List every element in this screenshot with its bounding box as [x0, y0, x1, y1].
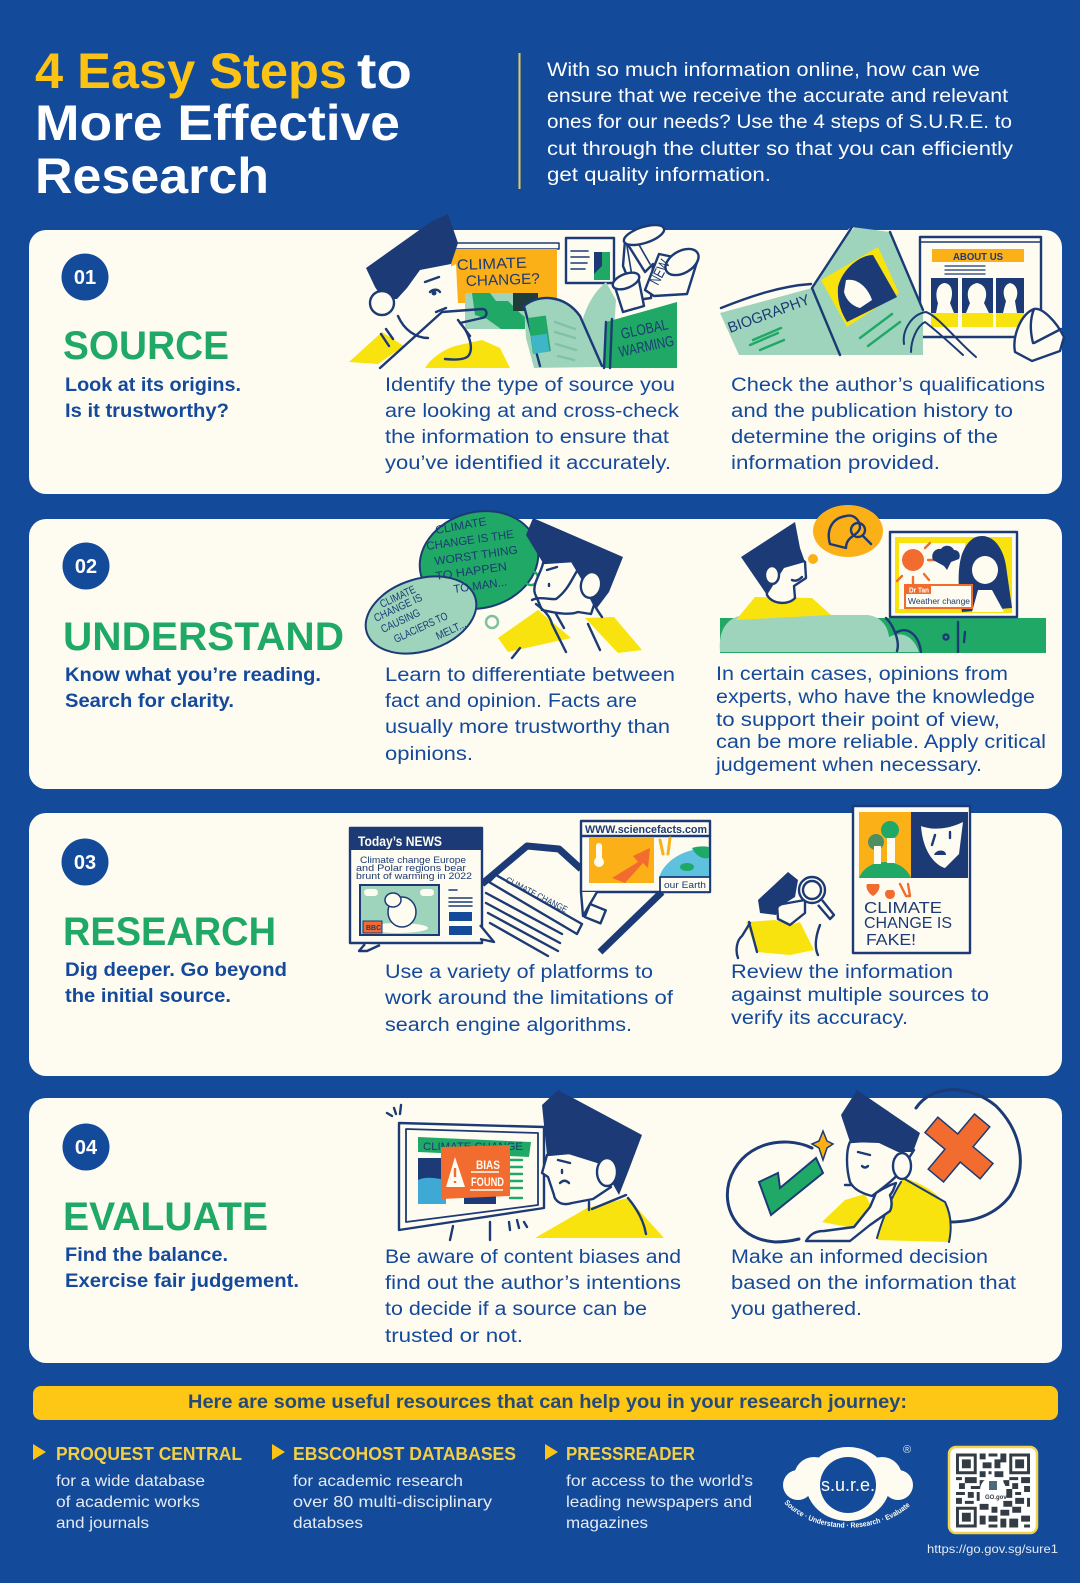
illustration: boy weighing opinions: CHANGE IS: [372, 592, 424, 625]
step number 01: 01: [74, 267, 96, 289]
body: fact and opinion: [385, 665, 675, 765]
body: biases: [385, 1247, 681, 1347]
title: to: [357, 43, 412, 99]
resource: pressreader: for access to the world’s: [566, 1473, 753, 1490]
illustration: boy with climate screen and books: CLIMATE: [457, 255, 527, 274]
body: biases: trusted or not.: [385, 1326, 523, 1347]
resource: proquest: [33, 1444, 242, 1532]
illustration: news window, search page and browser: CLIMATE CHANGE: [504, 875, 569, 915]
illustration: boy weighing opinions: CLIMATE: [434, 516, 488, 537]
illustration: boy weighing opinions: TO MAN...: [453, 577, 508, 596]
step number 02: [62, 542, 110, 590]
body: experts: experts, who have the knowledge: [716, 687, 1035, 708]
body: source type: you’ve identified it accurately.: [385, 453, 671, 474]
illustration: boy with climate screen and books: WARMING: [617, 333, 676, 361]
subheading: Know what you’re reading.: [65, 665, 321, 686]
step number 03: [62, 838, 108, 886]
illustration: boy weighing opinions: TO HAPPEN: [435, 561, 508, 583]
illustration: boy weighing opinions: CHANGE IS THE: [426, 529, 515, 553]
illustration: news window, search page and browser: BBC: [366, 925, 381, 932]
logo: s.u.r.e. cloud: [783, 1444, 913, 1528]
illustration: boy checking social post: FAKE!: [866, 932, 916, 949]
illustration: bias found on monitor: [387, 1090, 664, 1240]
illustration: boy weighing opinions: WORST THING: [434, 544, 519, 568]
resource: proquest: PROQUEST CENTRAL: [56, 1444, 242, 1464]
illustration: bias found on monitor: BIAS: [476, 1158, 500, 1172]
subheading: Look at its origins.: [65, 375, 241, 396]
body: verify: [731, 962, 989, 1029]
heading: source: SOURCE: [63, 324, 229, 368]
subheading: Find the balance.: [65, 1245, 228, 1266]
resource: pressreader: PRESSREADER: [566, 1444, 695, 1464]
heading: evaluate: EVALUATE: [63, 1195, 268, 1239]
intro text: ensure that we receive the accurate and relevant: [547, 86, 1009, 107]
body: verify: verify its accuracy.: [731, 1008, 908, 1029]
subheading: [65, 375, 241, 422]
step number 04: [62, 1124, 110, 1170]
illustration: boy with climate screen and books: GLOBAL: [619, 316, 670, 343]
title: More Effective: [35, 95, 400, 151]
body: fact and opinion: opinions.: [385, 744, 473, 765]
illustration: news window, search page and browser: and Polar regions bear: [356, 863, 466, 874]
intro text: ones for our needs? Use the 4 steps of S.U.R.E. to: [547, 112, 1012, 133]
body: decision: you gathered.: [731, 1299, 862, 1320]
illustration: boy weighing opinions: CLIMATE: [378, 584, 418, 611]
banner: resources heading: [33, 1386, 1058, 1420]
illustration: biography book and about us page: BIOGRAPHY: [726, 291, 812, 337]
logo: s.u.r.e. cloud: s.u.r.e.: [821, 1475, 875, 1495]
body: source type: the information to ensure that: [385, 427, 670, 448]
step number 02: 02: [75, 556, 97, 578]
illustration: boy with climate screen and books: [349, 214, 703, 368]
illustration: boy weighing opinions: [356, 498, 642, 667]
body: decision: [731, 1247, 1017, 1320]
body: biases: Be aware of content biases and: [385, 1247, 681, 1268]
body: platforms: Use a variety of platforms to: [385, 962, 653, 983]
body: author: information provided.: [731, 453, 940, 474]
resource: proquest: of academic works: [56, 1494, 200, 1511]
banner: resources heading: Here are some useful resources that can help you in your research journey:: [188, 1392, 907, 1413]
rolled newspapers: NEW: [647, 256, 674, 288]
body: verify: against multiple sources to: [731, 985, 989, 1006]
body: author: and the publication history to: [731, 401, 1013, 422]
panel: 02 understand: [29, 519, 1062, 789]
resource: pressreader: [545, 1444, 753, 1532]
subheading: Search for clarity.: [65, 691, 234, 712]
body: platforms: work around the limitations of: [384, 988, 674, 1009]
illustration: boy watching expert on tv: [720, 505, 1046, 653]
resource: ebscohost: EBSCOHOST DATABASES: [293, 1444, 516, 1464]
heading: research: RESEARCH: [63, 910, 276, 954]
illustration: boy checking social post: CHANGE IS: [864, 915, 952, 932]
title: Research: [35, 148, 269, 204]
body: author: [731, 375, 1045, 474]
intro text: cut through the clutter so that you can efficiently: [547, 139, 1014, 160]
resource: pressreader: leading newspapers and: [566, 1494, 752, 1511]
body: biases: find out the author’s intentions: [385, 1273, 681, 1294]
step number 01: [62, 254, 108, 300]
body: verify: Review the information: [731, 962, 953, 983]
step number 03: 03: [74, 852, 96, 874]
step number 04: 04: [75, 1137, 98, 1159]
body: experts: can be more reliable. Apply critical: [716, 732, 1046, 753]
intro text: [547, 60, 1014, 186]
illustration: news window, search page and browser: our Earth: [664, 880, 706, 890]
resource: ebscohost: databses: [293, 1515, 363, 1532]
qr code: [949, 1447, 1037, 1533]
illustration: boy with climate screen and books: CHANGE?: [466, 270, 540, 290]
body: decision: Make an informed decision: [731, 1247, 988, 1268]
subheading: [65, 960, 287, 1007]
panel: 01 source: [29, 230, 1062, 494]
body: decision: based on the information that: [731, 1273, 1017, 1294]
illustration: biography book and about us page: [720, 227, 1064, 361]
logo: s.u.r.e. cloud: Source · Understand · Research · Evaluate: [784, 1500, 910, 1528]
title: 4 Easy Steps: [35, 43, 347, 99]
body: author: determine the origins of the: [731, 427, 998, 448]
resource: ebscohost: [272, 1444, 516, 1532]
body: platforms: search engine algorithms.: [385, 1015, 632, 1036]
logo: s.u.r.e. cloud: ®: [903, 1444, 911, 1456]
subheading: the initial source.: [65, 986, 231, 1007]
illustration: bias found on monitor: FOUND: [471, 1175, 504, 1189]
illustration: news window, search page and browser: [350, 821, 710, 956]
body: platforms: [384, 962, 674, 1036]
title: [35, 43, 412, 204]
illustration: boy deciding between check and cross: [727, 1090, 1020, 1242]
body: fact and opinion: Learn to differentiate between: [385, 665, 675, 686]
body: experts: to support their point of view,: [716, 710, 1000, 731]
illustration: bias found on monitor: CLIMATE CHANGE: [423, 1141, 523, 1153]
panel: 04 evaluate: [29, 1098, 1062, 1363]
illustration: boy checking social post: [737, 806, 970, 958]
panel: 03 research: [29, 813, 1062, 1076]
illustration: news window, search page and browser: Climate change Europe: [360, 855, 466, 866]
resource: proquest: and journals: [56, 1515, 149, 1532]
resource: proquest: for a wide database: [56, 1473, 205, 1490]
body: source type: are looking at and cross-check: [385, 401, 680, 422]
heading: understand: UNDERSTAND: [63, 615, 344, 659]
subheading: Exercise fair judgement.: [65, 1271, 299, 1292]
qr code: GO.gov: [985, 1495, 1007, 1501]
body: biases: to decide if a source can be: [385, 1299, 647, 1320]
illustration: boy checking social post: CLIMATE: [864, 900, 942, 917]
body: source type: Identify the type of source you: [385, 375, 675, 396]
illustration: news window, search page and browser: WWW.sciencefacts.com: [585, 824, 707, 836]
body: fact and opinion: usually more trustworthy than: [385, 717, 670, 738]
body: source type: [385, 375, 680, 474]
illustration: boy watching expert on tv: Dr Tan: [909, 588, 929, 594]
subheading: [65, 665, 321, 712]
body: experts: In certain cases, opinions from: [716, 664, 1008, 685]
illustration: boy weighing opinions: CAUSING: [379, 607, 422, 636]
resource: ebscohost: for academic research: [293, 1473, 463, 1490]
subheading: [65, 1245, 299, 1292]
subheading: Dig deeper. Go beyond: [65, 960, 287, 981]
illustration: boy weighing opinions: GLACIERS TO: [392, 610, 450, 646]
resource: pressreader: magazines: [566, 1515, 648, 1532]
body: experts: judgement when necessary.: [715, 755, 982, 776]
rolled newspapers: [610, 221, 703, 312]
body: author: Check the author’s qualifications: [731, 375, 1045, 396]
intro text: With so much information online, how can we: [547, 60, 980, 81]
illustration: news window, search page and browser: Today’s NEWS: [358, 833, 442, 849]
resource: ebscohost: over 80 multi-disciplinary: [293, 1494, 492, 1511]
subheading: Is it trustworthy?: [65, 401, 229, 422]
illustration: boy weighing opinions: MELT...: [434, 618, 468, 643]
intro text: get quality information.: [547, 165, 771, 186]
illustration: boy watching expert on tv: Weather change: [908, 597, 971, 606]
illustration: news window, search page and browser: brunt of warming in 2022: [356, 871, 472, 882]
body: experts: [715, 664, 1046, 776]
illustration: biography book and about us page: ABOUT US: [953, 252, 1003, 263]
body: fact and opinion: fact and opinion. Facts are: [385, 691, 637, 712]
url: https://go.gov.sg/sure1: [927, 1542, 1058, 1556]
